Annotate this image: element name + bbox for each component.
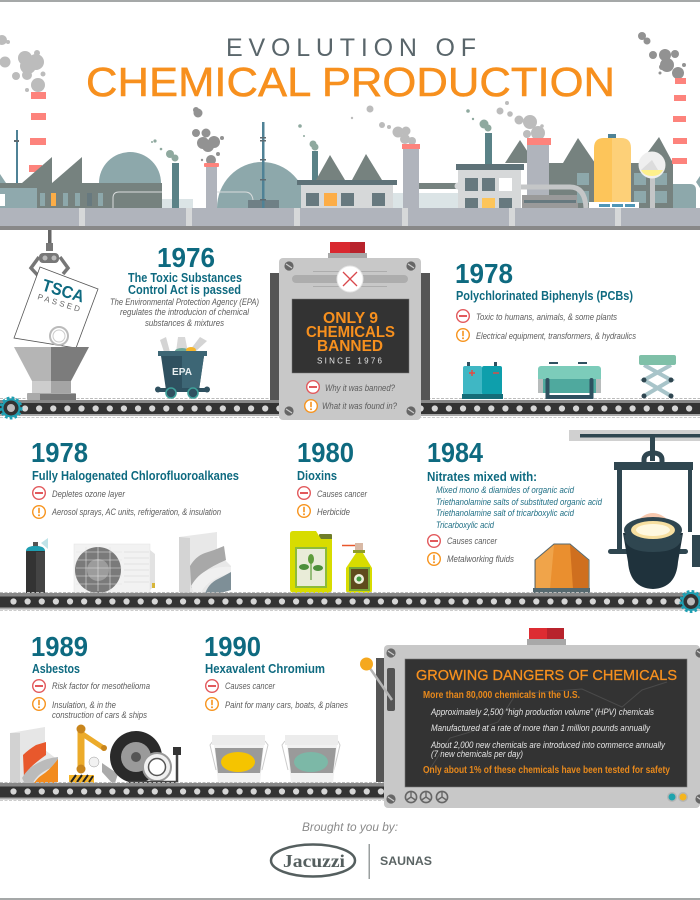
- icon: paint bucket green: [282, 735, 340, 783]
- 1984 nitrates text block: 1984: [427, 437, 483, 468]
- screws: [284, 261, 416, 416]
- banned screen: ONLY 9: [323, 310, 378, 327]
- hopper: [14, 347, 89, 400]
- 1978 chlorofluoroalkanes text block: Depletes ozone layer: [52, 489, 126, 500]
- 1990 hexavalent chromium text block: Hexavalent Chromium: [205, 662, 325, 676]
- 1989 asbestos text block: Insulation, & in the: [52, 700, 116, 711]
- smoke: mid chimney: [351, 106, 416, 145]
- 1976 text block: [110, 242, 259, 329]
- screen: More than 80,000 chemicals in the U.S.: [423, 689, 580, 701]
- 1976 text block: 1976: [157, 242, 215, 273]
- TSCA document: [14, 267, 98, 348]
- smoke: centre chimney: [192, 107, 224, 165]
- icon: spray can: [26, 538, 48, 593]
- banned screen: SINCE 1976: [317, 356, 383, 366]
- red button: [328, 242, 367, 258]
- conveyor belt 2: [0, 592, 700, 610]
- 1976 text block: Control Act is passed: [128, 283, 241, 297]
- 1976 text block: The Environmental Protection Agency (EPA): [110, 297, 259, 308]
- ground strip: [0, 208, 700, 226]
- smoke: right chimney: [638, 32, 686, 79]
- 1978 PCBs text block: [455, 258, 636, 342]
- title: CHEMICAL PRODUCTION: [86, 59, 615, 105]
- icon: herbicide jug: [290, 531, 332, 593]
- 1984 nitrates text block: Triethanolamine salts of substituted organic acid: [436, 497, 603, 508]
- 1984 nitrates text block: Triethanolamine salt of tricarboxylic acid: [436, 508, 575, 519]
- icon: wall insulation: [179, 532, 231, 600]
- dome and tower: [217, 162, 307, 208]
- 1990 hexavalent chromium text block: [204, 631, 348, 711]
- screen: [405, 659, 687, 787]
- banned screen: CHEMICALS: [306, 324, 395, 341]
- right striped chimney: [672, 78, 687, 164]
- legend: What it was found in?: [322, 401, 398, 412]
- flask: [650, 176, 655, 208]
- office building: [466, 109, 492, 132]
- back factory with gables: [505, 140, 535, 163]
- 1984 nitrates text block: Causes cancer: [447, 536, 498, 547]
- icon: scissor lift: [639, 355, 676, 398]
- panel: growing dangers of chemicals: [360, 628, 700, 808]
- title: EVOLUTION OF: [226, 34, 476, 62]
- yellow storage tank: [608, 134, 616, 140]
- screen: (7 new chemicals per day): [431, 749, 523, 760]
- 1980 dioxins text block: 1980: [297, 437, 354, 468]
- smoke: left chimney: [0, 35, 46, 92]
- 1984 nitrates text block: Tricarboxylic acid: [436, 520, 495, 531]
- footer: sponsor: Brought to you by:: [302, 820, 398, 834]
- icon: crucible with overhead rail: [569, 430, 700, 589]
- red button: [527, 628, 566, 645]
- icon: orange hopper: [533, 544, 590, 593]
- screws: [386, 648, 700, 804]
- 1980 dioxins text block: Causes cancer: [317, 489, 368, 500]
- 1989 asbestos text block: 1989: [31, 631, 88, 662]
- 1989 asbestos text block: Asbestos: [32, 662, 80, 676]
- legend: [305, 381, 398, 412]
- conveyor belt 3: [0, 782, 385, 800]
- 1980 dioxins text block: Dioxins: [297, 469, 337, 483]
- 1984 nitrates text block: Mixed mono & diamides of organic acid: [436, 485, 575, 496]
- claw crane holding TSCA document: [14, 230, 98, 400]
- banned screen: BANNED: [317, 338, 383, 355]
- panel: only 9 chemicals banned: [270, 242, 430, 420]
- icon: transformer tank: [538, 363, 601, 397]
- icon: AC unit: [74, 544, 155, 593]
- icon: gear right: [682, 592, 700, 611]
- 1990 hexavalent chromium text block: 1990: [204, 631, 261, 662]
- bottom border: [0, 898, 700, 900]
- knobs: [405, 791, 448, 803]
- icon: herbicide spray bottle: [342, 543, 372, 593]
- icon: asbestos wall insulation: [10, 727, 58, 792]
- 1976 text block: substances & mixtures: [145, 318, 224, 329]
- icon: battery: [462, 362, 503, 399]
- crane arm: [31, 230, 68, 281]
- icon: EPA mine cart: EPA: [172, 366, 192, 378]
- icon: paint bucket yellow: [210, 735, 268, 783]
- footer: sponsor: [271, 820, 432, 879]
- refinery buildings left: [16, 130, 18, 183]
- 1978 chlorofluoroalkanes text block: Fully Halogenated Chlorofluoroalkanes: [32, 469, 239, 483]
- 1989 asbestos text block: [31, 631, 150, 721]
- left striped chimney: [29, 92, 46, 172]
- lever: [360, 658, 392, 700]
- icon: robot arm: [69, 724, 107, 783]
- top border: [0, 0, 700, 2]
- icon: gear left: [2, 398, 20, 418]
- smoke: back chimney: [496, 101, 545, 140]
- screen: GROWING DANGERS OF CHEMICALS: [416, 667, 677, 684]
- 1978 PCBs text block: Polychlorinated Biphenyls (PCBs): [456, 289, 633, 303]
- 1978 PCBs text block: 1978: [455, 258, 513, 289]
- 1978 chlorofluoroalkanes text block: [31, 437, 239, 518]
- 1976 text block: regulates the introducion of chemical: [120, 307, 250, 318]
- 1984 nitrates text block: Nitrates mixed with:: [427, 470, 537, 484]
- icon: red X dial: [337, 266, 363, 292]
- 1978 PCBs text block: Toxic to humans, animals, & some plants: [476, 312, 617, 323]
- screen: Approximately 2,500 “high production volume” (HPV) chemicals: [430, 707, 654, 718]
- 1990 hexavalent chromium text block: Causes cancer: [225, 681, 276, 692]
- icon: EPA mine cart: [155, 337, 210, 398]
- 1980 dioxins text block: Herbicide: [317, 507, 350, 518]
- house building 1: [298, 124, 318, 150]
- logo: Jacuzzi: [271, 844, 355, 876]
- 1989 asbestos text block: construction of cars & ships: [52, 710, 147, 721]
- 1976 text block: The Toxic Substances: [128, 271, 242, 285]
- 1984 nitrates text block: [427, 437, 603, 565]
- screen: Manufactured at a rate of more than 1 million pounds annually: [431, 723, 651, 734]
- banned screen: [292, 299, 409, 373]
- factory skyline illustration: [0, 32, 700, 230]
- 1978 chlorofluoroalkanes text block: Aerosol sprays, AC units, refrigeration, & insulation: [51, 507, 221, 518]
- title: [86, 34, 615, 105]
- 1984 nitrates text block: Metalworking fluids: [447, 554, 514, 565]
- logo: Jacuzzi: Jacuzzi: [283, 851, 345, 871]
- 1980 dioxins text block: [297, 437, 368, 518]
- icon: spring, tire, bearing and plug: [102, 731, 181, 783]
- TSCA document: TSCA: [40, 276, 87, 306]
- 1989 asbestos text block: Risk factor for mesothelioma: [52, 681, 150, 692]
- 1990 hexavalent chromium text block: Paint for many cars, boats, & planes: [225, 700, 348, 711]
- legend: Why it was banned?: [325, 383, 396, 394]
- conveyor belt 1: [0, 398, 700, 418]
- 1978 PCBs text block: Electrical equipment, transformers, & hydraulics: [476, 331, 636, 342]
- TSCA document: PASSED: [36, 292, 81, 314]
- footer: sponsor: SAUNAS: [380, 856, 432, 868]
- 1978 chlorofluoroalkanes text block: 1978: [31, 437, 88, 468]
- indicator lights: [667, 792, 688, 802]
